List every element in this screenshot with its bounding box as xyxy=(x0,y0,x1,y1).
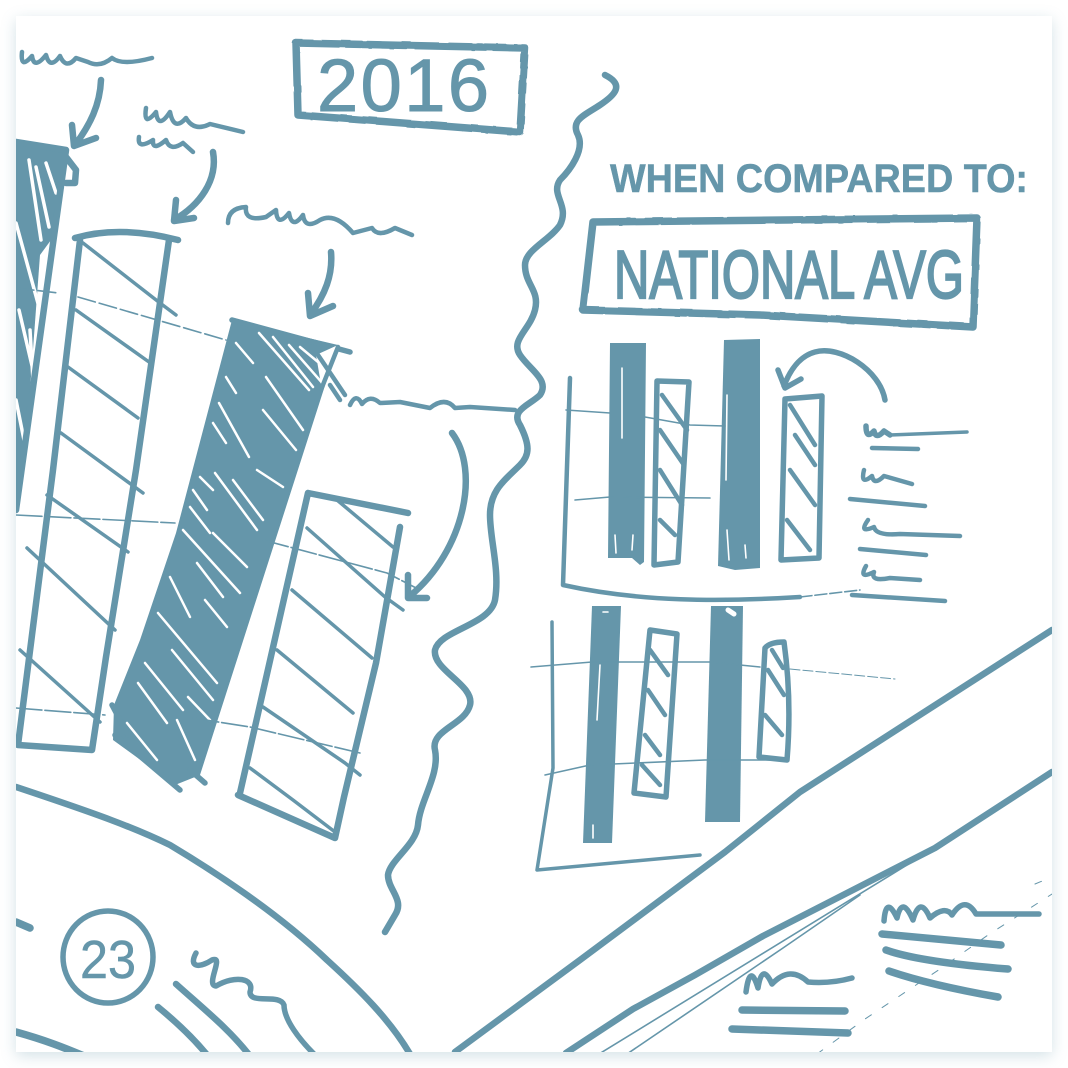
large curved panel edge xyxy=(16,787,410,1054)
year label box xyxy=(296,43,525,132)
small bar chart: lower xyxy=(531,606,895,870)
corner marks xyxy=(16,922,84,1056)
dark bar E xyxy=(583,606,621,843)
annotation: fourth scribble and arrow xyxy=(350,398,515,598)
legend: upper chart xyxy=(850,426,967,601)
bar 4 hatched xyxy=(238,493,408,838)
small bar chart: upper xyxy=(563,339,885,600)
legend: lower right xyxy=(882,905,1039,997)
bar 2 hatched xyxy=(18,232,178,750)
bar 1 dark hatched xyxy=(16,142,76,510)
hatched bar H xyxy=(759,642,789,760)
legend: lower middle xyxy=(732,974,852,1033)
bar 3 dark hatched xyxy=(112,320,350,790)
heading: when compared to: WHEN COMPARED TO: xyxy=(610,157,1028,201)
dark bar C xyxy=(718,339,760,570)
badge number: 23 xyxy=(80,930,136,990)
gridlines xyxy=(566,410,725,500)
annotation: top-left scribble and arrow xyxy=(22,52,152,146)
annotation: second scribble and arrow xyxy=(139,108,243,221)
axes xyxy=(537,622,700,870)
hatched bar B xyxy=(654,381,689,565)
number badge 23 xyxy=(63,911,153,1003)
diagonal panel edge 1 xyxy=(455,630,1052,1052)
dark bar G xyxy=(705,606,743,822)
curved arrow xyxy=(778,351,885,400)
gridlines xyxy=(531,662,760,667)
wavy divider xyxy=(385,75,616,932)
dark bar A xyxy=(608,343,646,565)
hatched bar D xyxy=(781,396,822,560)
text scribble beside badge xyxy=(158,953,314,1056)
axes xyxy=(563,378,800,600)
national average box xyxy=(583,218,977,327)
diagonal panel edge 2 xyxy=(566,772,1052,1054)
annotation: third scribble and arrow xyxy=(228,207,412,316)
bar chart: large tilted bars xyxy=(16,142,420,838)
hatched bar F xyxy=(634,630,677,797)
thin guide lines xyxy=(16,288,420,753)
year text: 2016 xyxy=(317,44,489,127)
